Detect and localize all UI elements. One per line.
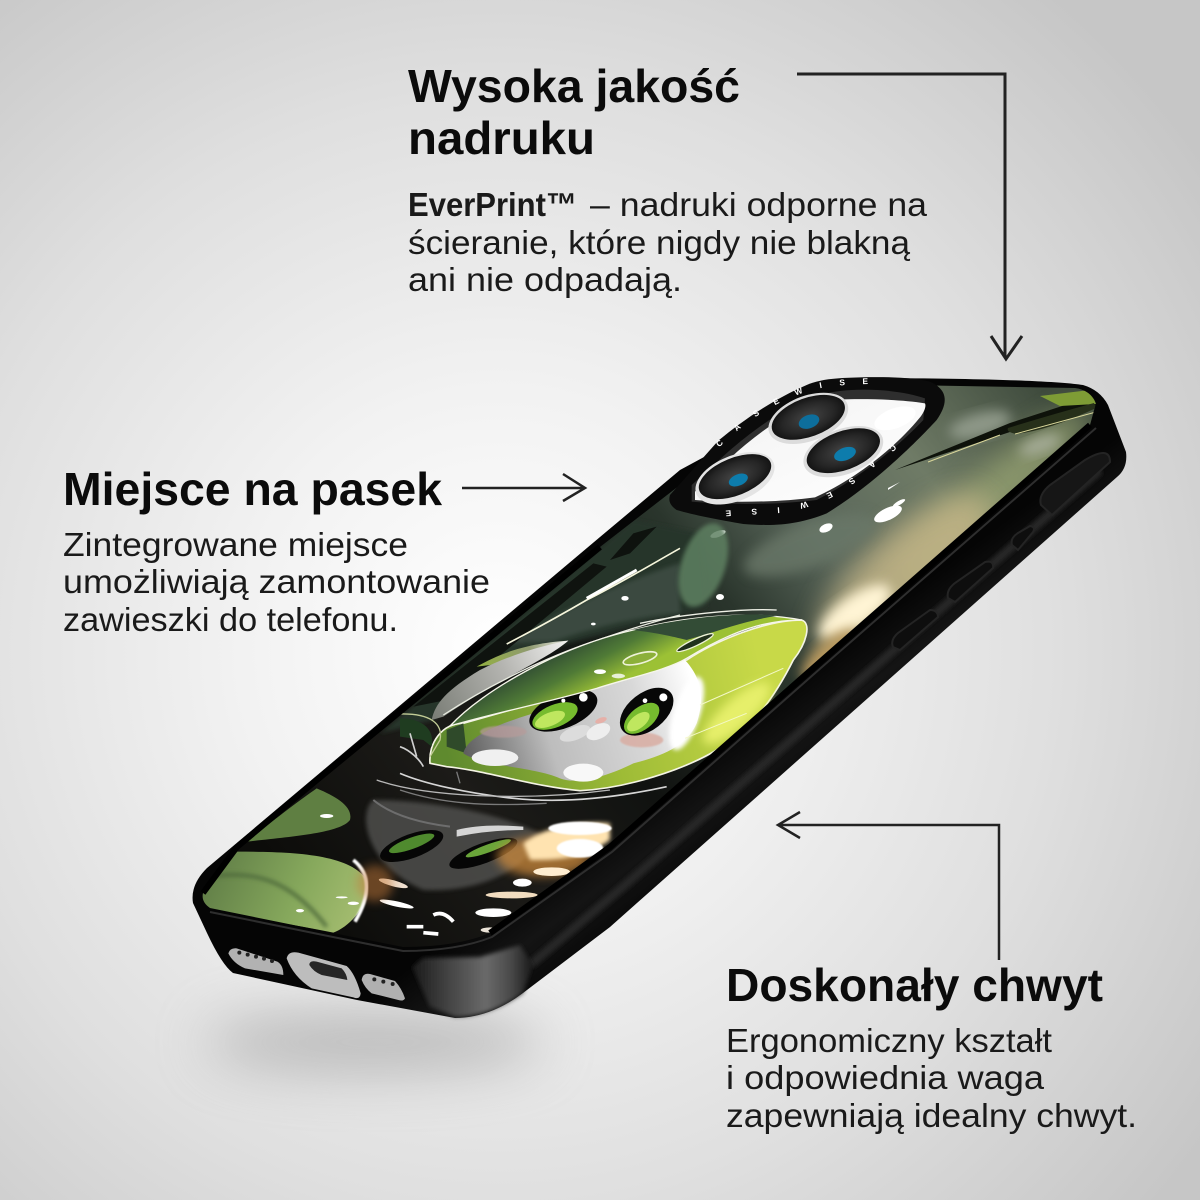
dark sheet bbox=[380, 520, 707, 733]
body text: i odpowiednia waga bbox=[726, 1059, 1045, 1096]
heading: nadruku bbox=[408, 112, 595, 164]
heading bbox=[408, 60, 740, 164]
arrow: strap slot bbox=[462, 474, 585, 501]
left grille bbox=[228, 948, 283, 975]
case glossy lower corner bbox=[412, 945, 533, 1017]
body text bbox=[63, 526, 490, 638]
callout: print quality bbox=[408, 60, 928, 298]
left leaf layers above the hood bbox=[380, 517, 738, 733]
bump frame bbox=[669, 377, 945, 525]
heading: Miejsce na pasek bbox=[63, 463, 442, 515]
cat eyes bbox=[529, 691, 598, 732]
usb port bbox=[287, 952, 361, 998]
stem curl and ripples bbox=[400, 718, 432, 747]
water highlights bbox=[710, 482, 906, 600]
right grille bbox=[362, 974, 405, 1001]
body text: ścieranie, które nigdy nie blakną bbox=[408, 224, 911, 261]
body text: – nadruki odporne na bbox=[590, 186, 928, 223]
illustrated back bbox=[202, 386, 1096, 947]
brand text top: CASEWISE bbox=[716, 378, 868, 446]
arrow: grip bbox=[778, 812, 999, 960]
camera bump bbox=[669, 377, 945, 525]
case rim bbox=[203, 425, 1090, 933]
callout: strap slot bbox=[63, 463, 490, 638]
lens left bbox=[688, 442, 782, 515]
light wedge bbox=[477, 641, 568, 667]
top corner blade leaf bbox=[895, 395, 1096, 470]
lens top bbox=[761, 383, 855, 454]
leaf, cat: zoom coordinate group bbox=[400, 610, 807, 805]
callout: grip bbox=[726, 959, 1137, 1134]
phone shadow bbox=[205, 1012, 545, 1072]
body text: zawieszki do telefonu. bbox=[63, 601, 398, 638]
heading: Doskonały chwyt bbox=[726, 959, 1103, 1011]
cat muzzle bbox=[560, 725, 590, 742]
side buttons bbox=[892, 453, 1110, 650]
lily pads and reflection: zoom coordinate group bbox=[200, 780, 612, 934]
hood leaf bbox=[450, 615, 802, 726]
brand text bottom: CASEWISE bbox=[726, 445, 896, 516]
grille holes bbox=[237, 951, 274, 963]
right grille holes bbox=[372, 977, 395, 986]
body text bbox=[408, 186, 928, 298]
grey sheet bbox=[432, 641, 568, 720]
body text: zapewniają idealny chwyt. bbox=[726, 1097, 1137, 1134]
body text: EverPrint™ bbox=[408, 186, 577, 223]
arrow: print quality bbox=[797, 74, 1022, 359]
body text: Zintegrowane miejsce bbox=[63, 526, 408, 563]
phone case with illustrated back bbox=[192, 377, 1126, 1020]
body text: ani nie odpadają. bbox=[408, 261, 682, 298]
long white highlight lines bbox=[507, 548, 680, 644]
case body bbox=[193, 378, 1126, 1018]
lower and back leaf bbox=[430, 620, 807, 791]
heading: Wysoka jakość bbox=[408, 60, 740, 112]
body text: umożliwiają zamontowanie bbox=[63, 563, 490, 600]
body text: Ergonomiczny kształt bbox=[726, 1022, 1052, 1059]
lens right bbox=[796, 416, 890, 487]
side highlight band bbox=[530, 470, 1100, 965]
charging port and speaker grilles bbox=[228, 948, 405, 1001]
white camera plate bbox=[695, 399, 925, 502]
cat bbox=[463, 658, 701, 781]
body text bbox=[726, 1022, 1137, 1134]
